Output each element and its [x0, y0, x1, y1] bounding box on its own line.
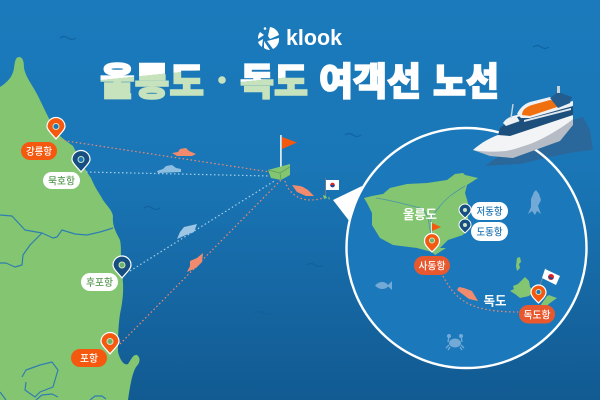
title: 울릉도: [100, 51, 204, 106]
icon: squid: [528, 190, 541, 215]
small flag at Sadong: [431, 222, 441, 234]
label: Gangneung port: [21, 142, 57, 160]
label: Sadong port: 사동항: [418, 258, 446, 272]
pin: Dokdo: [531, 285, 546, 303]
icon: fish: [375, 281, 392, 290]
pin: Sadong: [424, 234, 440, 252]
pin: Jeodong: [459, 204, 471, 218]
route: Gangneung to Ulleungdo: [60, 140, 270, 172]
route inside circle: Sadong to Dokdo: [443, 276, 518, 312]
label: Sadong port: [414, 256, 450, 275]
boat: Pohang route: [187, 253, 203, 272]
klook logo: [258, 25, 342, 50]
logo mark: [258, 27, 279, 50]
route: Ulleungdo to Dokdo: [285, 181, 323, 200]
label: Dodong port: [471, 222, 508, 241]
boat: Dokdo route: [292, 185, 314, 196]
ship shadow: [485, 117, 593, 166]
cruise ship: [473, 86, 573, 158]
label: Dodong port: 도동항: [476, 224, 502, 238]
pin: Mukho: [72, 151, 90, 172]
icon: crab: [446, 334, 464, 350]
label: Dokdo: 독도: [484, 290, 507, 310]
label: Ulleungdo: 울릉도: [403, 204, 437, 223]
Ulleungdo island: [364, 173, 478, 255]
label: Hupo port: 후포항: [86, 274, 113, 289]
pin: Hupo: [113, 256, 131, 278]
zoom callout circle: [333, 117, 593, 368]
label: Dokdo port: 독도항: [524, 306, 550, 322]
small Dokdo marker with flag: [323, 178, 339, 200]
route: Hupo to Ulleungdo: [130, 180, 276, 271]
logo wordmark: klook: [286, 25, 342, 50]
label: Mukho port: [43, 172, 80, 189]
pin: Pohang: [101, 333, 119, 354]
island streams: [376, 186, 465, 238]
route: Pohang to Ulleungdo: [120, 180, 281, 344]
pin: Dodong: [459, 219, 471, 233]
boat: Mukho route: [157, 165, 181, 173]
label: Mukho port: 묵호항: [48, 172, 75, 188]
pin: Gangneung: [47, 118, 65, 139]
title: 여객선: [319, 51, 421, 106]
mainland Korea east coast: [0, 57, 140, 400]
label: Pohang port: [71, 349, 107, 367]
rivers: [0, 215, 113, 400]
label: Jeodong port: 저동항: [476, 203, 502, 218]
title: 노선: [433, 51, 499, 106]
title: [100, 51, 499, 106]
title: 독도: [240, 51, 308, 106]
Ulleungdo marker: [268, 135, 297, 180]
boat: Gangneung route: [172, 148, 196, 156]
flag at Dokdo: [540, 268, 560, 285]
boat inside circle: [457, 287, 478, 301]
label: Jeodong port: [471, 202, 508, 220]
boat: Hupo route: [177, 224, 197, 239]
label: Hupo port: [81, 273, 118, 291]
Dokdo islands: [510, 257, 557, 308]
label: Pohang port: 포항: [80, 350, 98, 365]
label: Dokdo port: [519, 305, 555, 324]
label: Gangneung port: 강릉항: [26, 143, 52, 158]
route: Mukho to Ulleungdo: [86, 172, 270, 176]
sea waves: [60, 36, 579, 366]
